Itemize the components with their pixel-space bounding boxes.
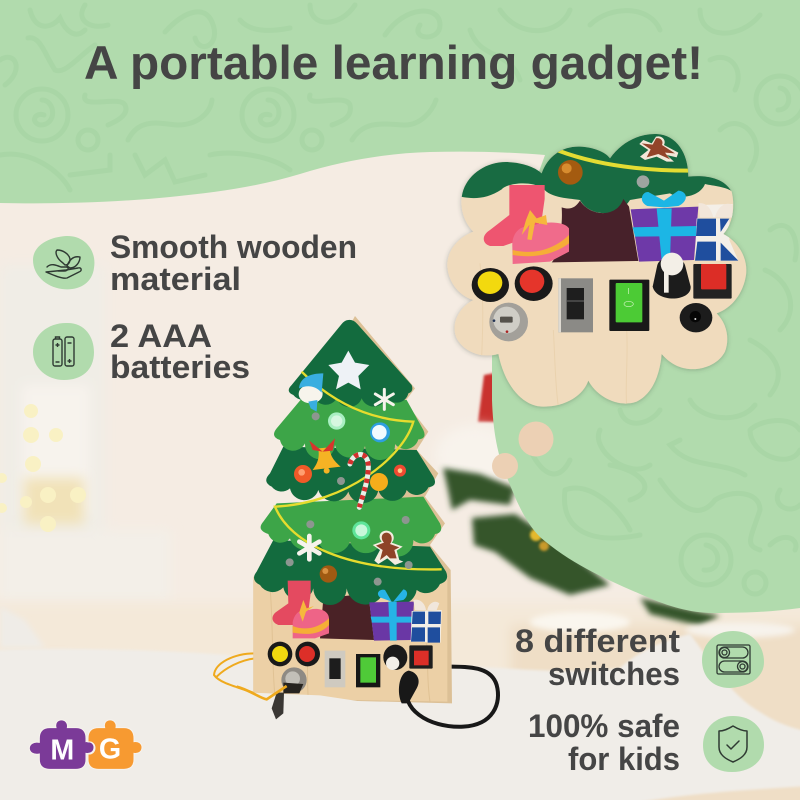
foliage layer 5 xyxy=(254,540,447,605)
blue gift box xyxy=(411,600,442,643)
snowman xyxy=(299,373,323,412)
snowflake lower xyxy=(299,536,319,559)
icon: shield with check xyxy=(703,716,764,772)
green wave panel with squiggle pattern xyxy=(0,0,800,613)
slide switch xyxy=(325,651,345,687)
cloud stocking xyxy=(484,185,545,246)
thought bubble dot large xyxy=(518,422,554,456)
cloud yellow button xyxy=(472,268,509,302)
tree trunk xyxy=(320,593,374,640)
cloud DC jack xyxy=(680,303,712,332)
cloud wood grain xyxy=(480,263,627,407)
window frame blur xyxy=(0,265,170,602)
text: smooth wooden material xyxy=(110,229,357,297)
title: A portable learning gadget! xyxy=(84,36,703,89)
wooden board xyxy=(253,316,452,703)
garland xyxy=(275,372,442,569)
green rocker switch xyxy=(356,654,380,687)
purple gift box xyxy=(369,589,414,641)
cloud wood base xyxy=(447,134,746,407)
icon: batteries xyxy=(33,323,94,380)
cloud metal rivet xyxy=(637,175,649,188)
heart gift box xyxy=(293,600,329,638)
cloud slide switch xyxy=(558,278,593,332)
star light xyxy=(328,351,369,389)
cloud gingerbread xyxy=(639,136,678,162)
logo: MG puzzle pieces xyxy=(29,720,142,769)
cloud green rocker xyxy=(609,280,649,331)
text: 100% safe for kids: for kids xyxy=(568,741,680,777)
candy cane xyxy=(350,454,368,507)
text: 8 different switches: 8 different xyxy=(515,623,680,659)
cloud key lock xyxy=(489,303,528,341)
red square button xyxy=(409,645,433,669)
text: 2 AAA batteries xyxy=(110,318,250,385)
front snow over board base xyxy=(227,687,480,743)
cable plug xyxy=(399,671,419,703)
red decoration blur xyxy=(478,372,500,422)
cloud purple gift xyxy=(631,191,698,262)
logo piece G: G xyxy=(99,734,121,766)
text: 2 AAA batteries: 2 AAA xyxy=(110,318,212,354)
cloud tree top xyxy=(462,134,732,214)
bokeh lights xyxy=(0,404,86,532)
cloud red square button xyxy=(693,264,732,299)
text: 2 AAA batteries: batteries xyxy=(110,349,250,385)
yellow push button xyxy=(268,642,292,666)
snow xyxy=(0,606,800,800)
feature: 2 AAA batteries xyxy=(33,318,250,385)
feature: smooth wooden material xyxy=(33,229,357,297)
yellow cord xyxy=(214,653,255,693)
text: smooth wooden material: Smooth wooden xyxy=(110,229,357,265)
cloud trunk xyxy=(552,199,638,262)
gingerbread man xyxy=(373,531,403,565)
text: 8 different switches: switches xyxy=(548,656,680,692)
feature: 8 different switches xyxy=(515,623,764,692)
cloud red button xyxy=(515,266,553,301)
key lock and key xyxy=(237,667,307,719)
red push button xyxy=(295,642,320,666)
thought cloud: close-up of switches xyxy=(440,130,750,407)
blurred fir branches xyxy=(443,468,720,626)
text: 8 different switches xyxy=(515,623,680,692)
logo piece M: M xyxy=(50,734,74,766)
cloud knob xyxy=(653,253,691,299)
text: 100% safe for kids xyxy=(528,708,680,777)
snowflake top xyxy=(375,389,393,409)
text: 100% safe for kids: 100% safe xyxy=(528,708,680,744)
table xyxy=(0,603,800,800)
black cable xyxy=(407,667,498,727)
rivets xyxy=(286,412,413,586)
foliage layer 1 xyxy=(289,320,412,407)
knob xyxy=(383,645,407,670)
foliage layer 4 xyxy=(261,497,441,557)
foliage layer 3 xyxy=(266,447,435,503)
text: smooth wooden material: material xyxy=(110,261,241,297)
icon: switches xyxy=(702,631,764,688)
foliage layer 2 xyxy=(274,397,425,460)
feature: 100% safe for kids xyxy=(528,708,764,777)
bell xyxy=(309,438,341,474)
thought bubble dot small xyxy=(492,453,518,479)
Christmas tree busy board xyxy=(214,316,498,743)
stocking xyxy=(272,581,311,625)
cloud heart box xyxy=(512,210,569,264)
cloud blue gift xyxy=(695,203,738,261)
LEDs xyxy=(294,412,406,583)
cloud amber LED xyxy=(558,160,583,185)
icon: plant in hand xyxy=(33,236,94,289)
